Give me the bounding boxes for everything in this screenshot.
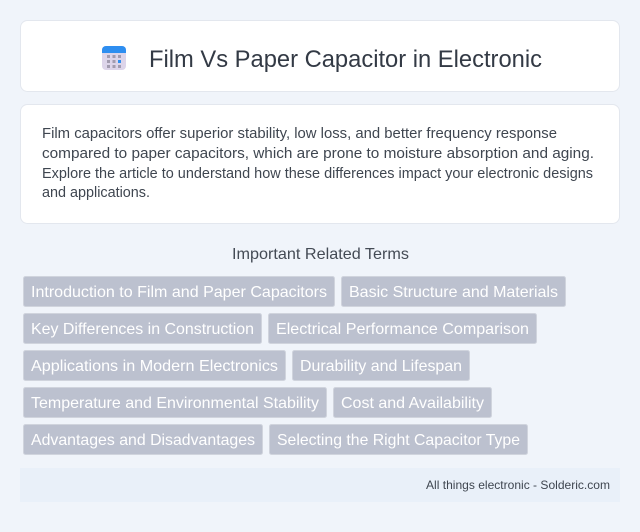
text block: intro xyxy=(42,126,594,201)
tag: Applications in Modern Electronics xyxy=(31,358,278,375)
footer text: All things electronic - Solderic.com xyxy=(426,478,610,492)
text block: intro: Explore the article to understand how these differences impact your electronic designs xyxy=(42,166,593,182)
tag xyxy=(334,388,492,418)
title: Film Vs Paper Capacitor in Electronic xyxy=(149,46,542,73)
tag: Selecting the Right Capacitor Type xyxy=(277,432,520,449)
text block: intro: and applications. xyxy=(42,185,150,201)
tag xyxy=(24,350,286,380)
tag list xyxy=(24,276,566,454)
tag: Durability and Lifespan xyxy=(300,358,462,375)
tag: Introduction to Film and Paper Capacitors xyxy=(31,284,327,301)
tag xyxy=(24,388,326,418)
tag xyxy=(292,350,470,380)
tag xyxy=(24,424,262,454)
tag: Basic Structure and Materials xyxy=(349,284,558,301)
tag: Advantages and Disadvantages xyxy=(31,432,255,449)
tag xyxy=(268,314,536,344)
tag: Cost and Availability xyxy=(341,395,484,412)
icon: calendar xyxy=(102,46,126,70)
tag: Electrical Performance Comparison xyxy=(276,321,529,338)
panel: title card xyxy=(20,20,620,92)
tag: Temperature and Environmental Stability xyxy=(31,395,319,412)
tag: Key Differences in Construction xyxy=(31,321,254,338)
tag xyxy=(24,276,334,306)
text block: intro: Film capacitors offer superior stability, low loss, and better frequency response xyxy=(42,126,557,142)
heading: related terms: Important Related Terms xyxy=(232,246,409,263)
tag xyxy=(270,424,528,454)
tag xyxy=(342,276,566,306)
panel: intro text xyxy=(20,104,620,224)
text block: intro: compared to paper capacitors, which are prone to moisture absorption and aging. xyxy=(42,146,594,162)
tag xyxy=(24,314,262,344)
footer xyxy=(20,468,620,502)
